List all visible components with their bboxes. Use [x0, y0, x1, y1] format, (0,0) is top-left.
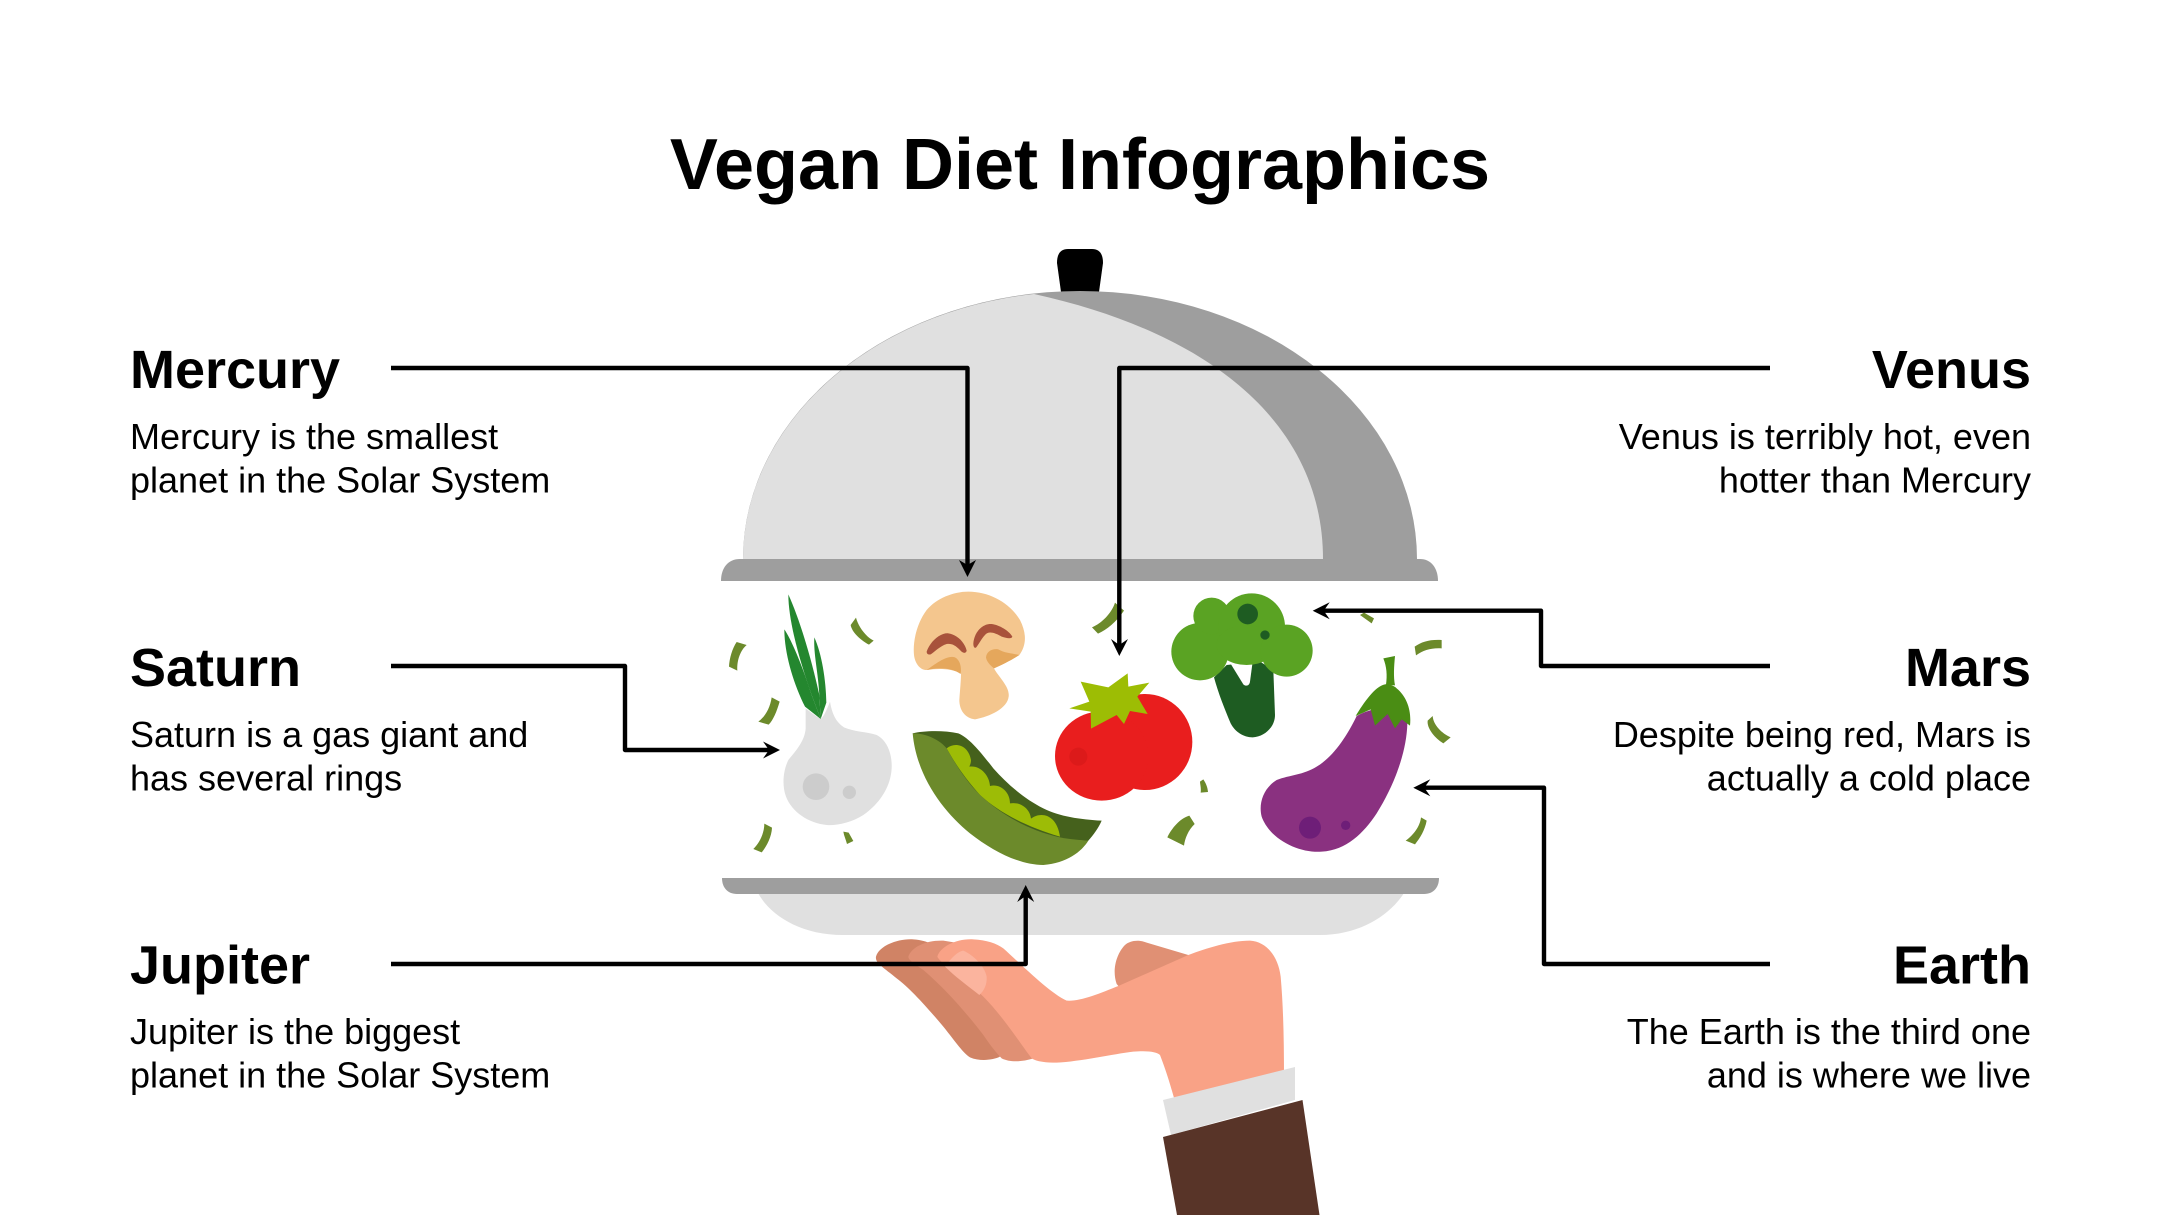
thumb [1115, 941, 1193, 992]
icon: tomato [1055, 673, 1192, 801]
vegetables left group [729, 592, 1025, 852]
text block: Venus: hotter than Mercury [1719, 460, 2031, 500]
text block: Earth: The Earth is the third one [1627, 1011, 2031, 1052]
second finger [908, 941, 1033, 1061]
title: Vegan Diet Infographics [670, 125, 1490, 205]
text block: Mars [1613, 638, 2031, 798]
text block: Saturn: Saturn is a gas giant and [130, 714, 528, 755]
text block: Saturn: Saturn [130, 638, 301, 698]
palm and wrist [937, 939, 1284, 1107]
text block: Mars: Despite being red, Mars is [1613, 714, 2031, 755]
text block: Mars: actually a cold place [1707, 758, 2031, 798]
text block: Jupiter: Jupiter is the biggest [130, 1011, 460, 1052]
icon: pea pod [913, 731, 1102, 865]
dome rim [721, 559, 1438, 581]
icon: onion [784, 594, 892, 825]
arrow: Jupiter to pea pod [391, 885, 1034, 964]
text block: Mercury: Mercury [130, 340, 340, 400]
confetti right [1092, 603, 1451, 846]
dome shadow [743, 291, 1417, 559]
icon: serving tray [722, 878, 1439, 935]
arrow: Earth to eggplant [1413, 779, 1770, 964]
third finger [876, 939, 1000, 1060]
text block: Jupiter: planet in the Solar System [130, 1054, 550, 1096]
text block: Saturn [130, 638, 528, 798]
text block: Earth: and is where we live [1707, 1054, 2031, 1096]
tray base [758, 893, 1404, 935]
text block: Mercury [130, 340, 550, 500]
icon: serving cloche dome [721, 249, 1438, 581]
text block: Venus [1619, 340, 2031, 500]
icon: mushroom [914, 592, 1025, 719]
text block: Jupiter [130, 936, 550, 1096]
text block: Venus: Venus [1872, 340, 2031, 400]
icon: waiter hand [876, 939, 1320, 1215]
arrow: Mars to broccoli [1313, 602, 1770, 666]
text block: Mars: Mars [1905, 638, 2031, 698]
jacket sleeve [1163, 1100, 1320, 1215]
confetti left [729, 618, 874, 852]
dome highlight [743, 294, 1323, 559]
vegetables right group [1055, 603, 1451, 852]
text block: Earth: Earth [1893, 936, 2031, 996]
cloche knob [1057, 249, 1103, 292]
tray rim [722, 878, 1439, 894]
text block: Earth [1627, 936, 2031, 1096]
arrow: Venus to tomato [1111, 368, 1770, 656]
icon: broccoli [1171, 593, 1313, 737]
shirt cuff [1163, 1067, 1295, 1135]
arrow: Saturn to onion [391, 666, 780, 758]
icon: eggplant [1261, 656, 1410, 852]
text block: Venus: Venus is terribly hot, even [1619, 416, 2031, 457]
text block: Saturn: has several rings [130, 758, 402, 798]
text block: Mercury: planet in the Solar System [130, 460, 550, 500]
fingernail highlight [945, 951, 987, 995]
arrow: Mercury to mushroom [391, 368, 976, 577]
text block: Jupiter: Jupiter [130, 936, 310, 996]
text block: Mercury: Mercury is the smallest [130, 416, 498, 457]
